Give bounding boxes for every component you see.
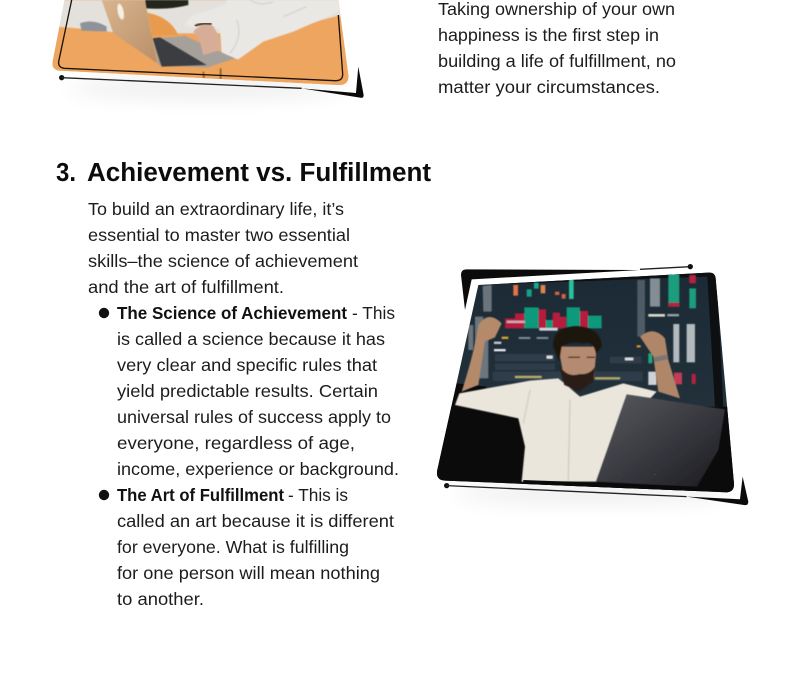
bullet: the science of achievement: income, experience or background. — [117, 459, 399, 479]
laptop keyboard — [153, 37, 207, 67]
heading: section 3: Achievement vs. Fulfillment — [87, 159, 432, 187]
bullet: the science of achievement: is called a science because it has — [117, 329, 385, 349]
paragraph: taking ownership: happiness is the first step in — [438, 25, 659, 45]
bullet: the art of fulfillment: - This is — [288, 485, 348, 505]
intro paragraph: essential to master two essential — [88, 225, 350, 245]
laptop — [596, 394, 725, 487]
thin inner outline — [59, 0, 343, 81]
photo: woman working on laptop on orange background — [50, 0, 364, 98]
bullet: the art of fulfillment: The Art of Fulfillment — [117, 485, 284, 505]
black frame accents — [444, 264, 748, 505]
next heading tops clipped at page edge — [620, 473, 656, 476]
laptop lid — [102, 0, 157, 63]
laptop base — [153, 36, 235, 68]
bullet: the science of achievement: - This — [352, 303, 395, 323]
bullet: the art of fulfillment: called an art because it is different — [117, 511, 394, 531]
bullet: the art of fulfillment: for everyone. What is fulfilling — [117, 537, 349, 557]
photo: man celebrating in front of trading screen — [433, 264, 748, 505]
bullet: the art of fulfillment: for one person will mean nothing — [117, 563, 380, 583]
photo image content — [50, 0, 353, 90]
bullet: the science of achievement: The Science of Achievement — [117, 303, 347, 323]
bullet: the art of fulfillment — [99, 485, 394, 609]
woman's white shirt — [185, 0, 338, 59]
intro paragraph: and the art of fulfillment. — [88, 277, 284, 297]
raised arms — [462, 317, 502, 392]
bullet: the science of achievement: universal rules of success apply to — [117, 407, 391, 427]
bullet: the science of achievement — [99, 303, 399, 479]
bullet: the art of fulfillment: to another. — [117, 589, 204, 609]
paragraph: taking ownership — [438, 0, 676, 97]
man's body and shirt — [455, 317, 680, 482]
bullet: the science of achievement: everyone, regardless of age, — [117, 433, 355, 453]
face and beard — [559, 346, 597, 379]
photo image content — [433, 270, 737, 497]
hand — [193, 25, 220, 55]
trading chart candles and volume bars — [468, 274, 696, 385]
intro paragraph — [88, 199, 358, 297]
intro paragraph: To build an extraordinary life, it’s — [88, 199, 344, 219]
bullet: the science of achievement: yield predictable results. Certain — [117, 381, 378, 401]
paragraph: taking ownership: matter your circumstances. — [438, 77, 660, 97]
heading: section 3: 3. — [56, 159, 76, 187]
paragraph: taking ownership: building a life of fulfillment, no — [438, 51, 676, 71]
black corner and base line accent — [59, 67, 364, 98]
bullet: the science of achievement: very clear and specific rules that — [117, 355, 377, 375]
intro paragraph: skills–the science of achievement — [88, 251, 358, 271]
